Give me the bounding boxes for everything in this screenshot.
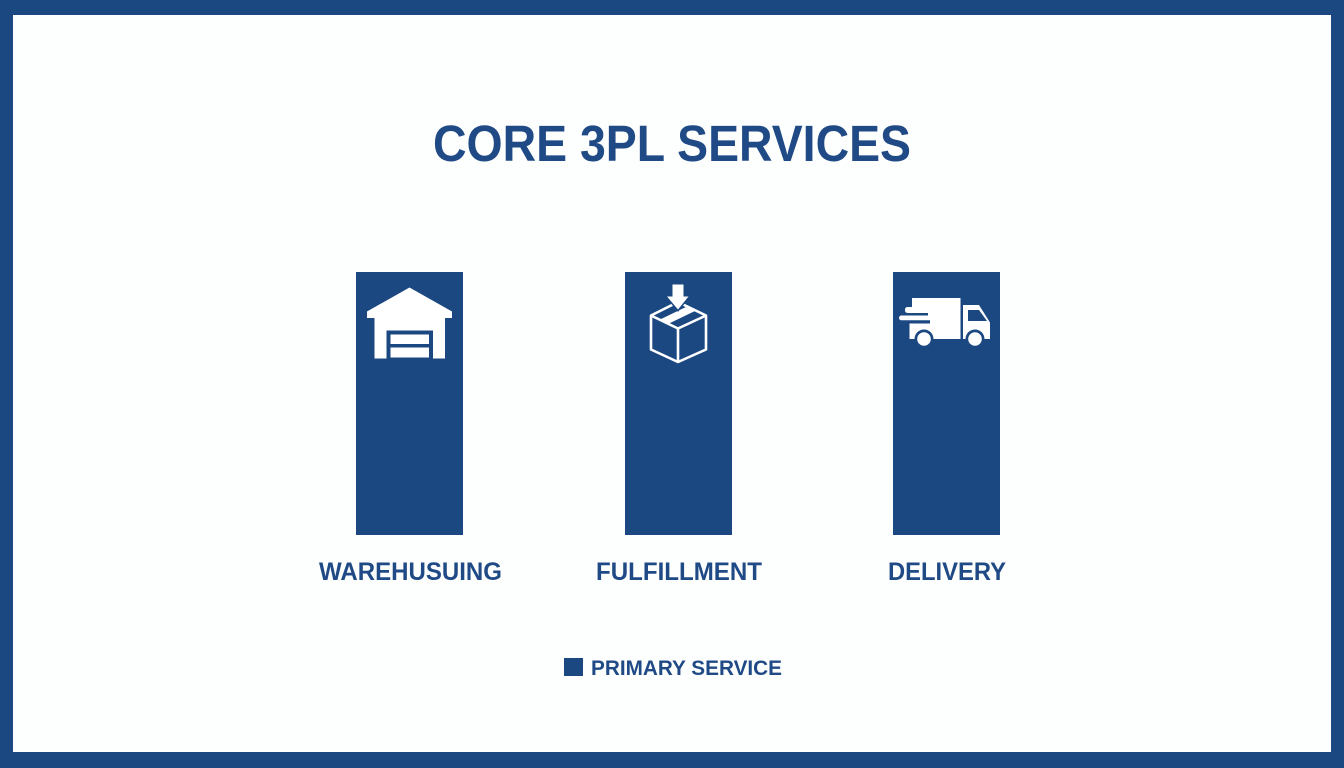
legend swatch (564, 658, 583, 676)
legend label: PRIMARY SERVICE (591, 656, 782, 680)
warehousing bar (356, 272, 463, 535)
delivery label: DELIVERY (888, 558, 1006, 586)
legend (564, 656, 782, 680)
delivery bar (893, 272, 1000, 535)
fulfillment bar (625, 272, 732, 535)
fulfillment label: FULFILLMENT (596, 558, 762, 586)
title: CORE 3PL SERVICES (433, 115, 911, 172)
panel: fulfillment column (596, 272, 762, 586)
warehousing label: WAREHUSUING (319, 558, 502, 586)
icon: box with down arrow (651, 284, 706, 362)
panel: delivery column (888, 272, 1006, 586)
icon: delivery truck (899, 298, 990, 348)
icon: warehouse (367, 288, 452, 358)
panel: warehousing column (319, 272, 502, 586)
